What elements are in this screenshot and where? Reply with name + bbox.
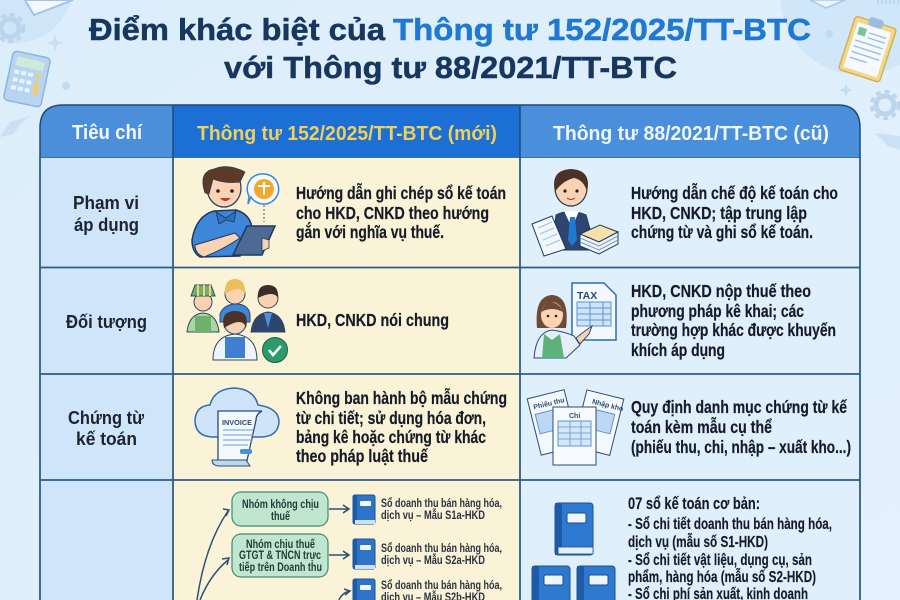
label: S2a: Sổ doanh thu bán hàng hóa,	[381, 543, 502, 555]
label: S2b	[381, 580, 502, 600]
label: S2b: Sổ doanh thu bán hàng hóa,	[381, 580, 502, 592]
icon: woman with tax form: TAX	[577, 290, 597, 302]
group box: chịu thuế GTGT & TNCN	[232, 534, 328, 577]
text: phạm vi, Thông tư 88	[631, 182, 838, 242]
icon: man in suit with documents	[532, 169, 618, 256]
text: chứng từ, Thông tư 152: bảng kê hoặc chứng từ khác	[296, 427, 486, 447]
text: phạm vi, Thông tư 152: Hướng dẫn ghi chép sổ kế toán	[296, 182, 506, 203]
icon: woman with tax form	[534, 283, 616, 358]
arrows to groups	[197, 505, 350, 600]
label: S2a: dịch vụ – Mẫu S2a-HKD	[381, 554, 485, 567]
book: S2b	[353, 579, 375, 600]
label: S2a	[381, 543, 502, 567]
text: đối tượng, Thông tư 88	[631, 281, 836, 360]
text: sổ kế toán, Thông tư 88: 07 sổ kế toán cơ bản:	[628, 494, 760, 513]
label: S1a: Sổ doanh thu bán hàng hóa,	[381, 498, 502, 510]
table header row: Thông tư 88/2021/TT-BTC (cũ)	[553, 122, 829, 145]
row label: Phạm vi áp dụng	[73, 192, 139, 235]
icon: stack of ledgers	[532, 503, 615, 600]
text: đối tượng, Thông tư 88: phương pháp kê khai; các	[631, 301, 804, 321]
group box: không chịu thuế: thuế	[271, 511, 290, 523]
table header row: Tiêu chí	[72, 122, 143, 144]
text: chứng từ, Thông tư 88	[631, 397, 851, 457]
text: chứng từ, Thông tư 152	[296, 387, 507, 466]
text: đối tượng, Thông tư 152: HKD, CNKD nói chung	[296, 310, 449, 330]
group box: chịu thuế GTGT & TNCN: tiếp trên Doanh thu	[239, 562, 322, 574]
book: S2a	[353, 539, 375, 569]
decoration: left corner icons	[0, 0, 73, 137]
label: S1a	[381, 498, 502, 522]
group box: không chịu thuế: Nhóm không chịu	[242, 499, 319, 511]
title: với Thông tư 88/2021/TT-BTC	[224, 50, 677, 85]
row label: Chứng từ kế toán	[68, 407, 145, 449]
text: phạm vi, Thông tư 152: gắn với nghĩa vụ thuế.	[296, 221, 444, 242]
decoration: right corner icons	[780, 0, 900, 150]
text: chứng từ, Thông tư 152: từ chi tiết; sử dụng hóa đơn,	[296, 408, 486, 428]
text: chứng từ, Thông tư 152: Không ban hành bộ mẫu chứng	[296, 387, 507, 408]
label: S1a: dịch vụ – Mẫu S1a-HKD	[381, 509, 485, 522]
title: Thông tư 152/2025/TT-BTC	[393, 12, 811, 47]
row label: Phạm vi áp dụng: áp dụng	[74, 214, 139, 235]
text: sổ kế toán, Thông tư 88	[628, 494, 832, 600]
icon: cloud invoice	[195, 388, 279, 466]
icon: voucher forms: Chi	[569, 413, 580, 420]
icon: man with tablet	[192, 167, 279, 257]
icon: voucher forms: Phiếu thu	[533, 396, 565, 412]
text: chứng từ, Thông tư 152: theo pháp luật thuế	[296, 446, 428, 466]
table header row	[40, 105, 860, 157]
text: phạm vi, Thông tư 152: cho HKD, CNKD theo hướng	[296, 203, 489, 223]
text: đối tượng, Thông tư 88: trường hợp khác được khuyến	[631, 320, 836, 340]
icon: cloud invoice: INVOICE	[222, 418, 252, 427]
text: đối tượng, Thông tư 88: khích áp dụng	[631, 340, 725, 360]
text: phạm vi, Thông tư 88: chứng từ và ghi sổ kế toán.	[631, 222, 813, 242]
table header row: Thông tư 152/2025/TT-BTC (mới)	[197, 122, 497, 145]
text: phạm vi, Thông tư 152	[296, 182, 506, 242]
table body backgrounds	[40, 157, 860, 600]
group box: chịu thuế GTGT & TNCN: GTGT & TNCN trực	[239, 550, 321, 562]
icon: voucher forms: Nhập kho	[591, 399, 624, 413]
text: phạm vi, Thông tư 88: Hướng dẫn chế độ kế toán cho	[631, 182, 838, 203]
text: đối tượng, Thông tư 88: HKD, CNKD nộp thuế theo	[631, 281, 811, 301]
group box: chịu thuế GTGT & TNCN: Nhóm chịu thuế	[246, 539, 315, 551]
book: S1a	[353, 495, 375, 524]
flow diagram: sổ kế toán, Thông tư 152	[197, 492, 502, 600]
text: sổ kế toán, Thông tư 88: dịch vụ (mẫu số S1-HKD)	[628, 532, 768, 551]
text: chứng từ, Thông tư 88: Quy định danh mục chứng từ kế	[631, 397, 847, 417]
icon: voucher forms	[527, 390, 626, 465]
text: sổ kế toán, Thông tư 88: phẩm, hàng hóa (mẫu số S2-HKD)	[628, 567, 816, 586]
text: phạm vi, Thông tư 88: HKD, CNKD; tập trung lập	[631, 203, 807, 223]
row label: Chứng từ kế toán: kế toán	[76, 428, 137, 449]
row label: Đối tượng: Đối tượng	[66, 311, 147, 332]
title: Điểm khác biệt của	[89, 12, 386, 47]
group box: không chịu thuế	[232, 492, 328, 526]
title	[89, 12, 811, 85]
text: sổ kế toán, Thông tư 88: - Sổ chi tiết vật liệu, dụng cụ, sản	[628, 551, 812, 569]
row label: Phạm vi áp dụng: Phạm vi	[73, 192, 139, 213]
comparison table	[40, 105, 860, 600]
text: chứng từ, Thông tư 88: toán kèm mẫu cụ thể	[631, 416, 772, 437]
icon: group of people with check	[187, 279, 288, 362]
row label: Chứng từ kế toán: Chứng từ	[68, 407, 145, 428]
